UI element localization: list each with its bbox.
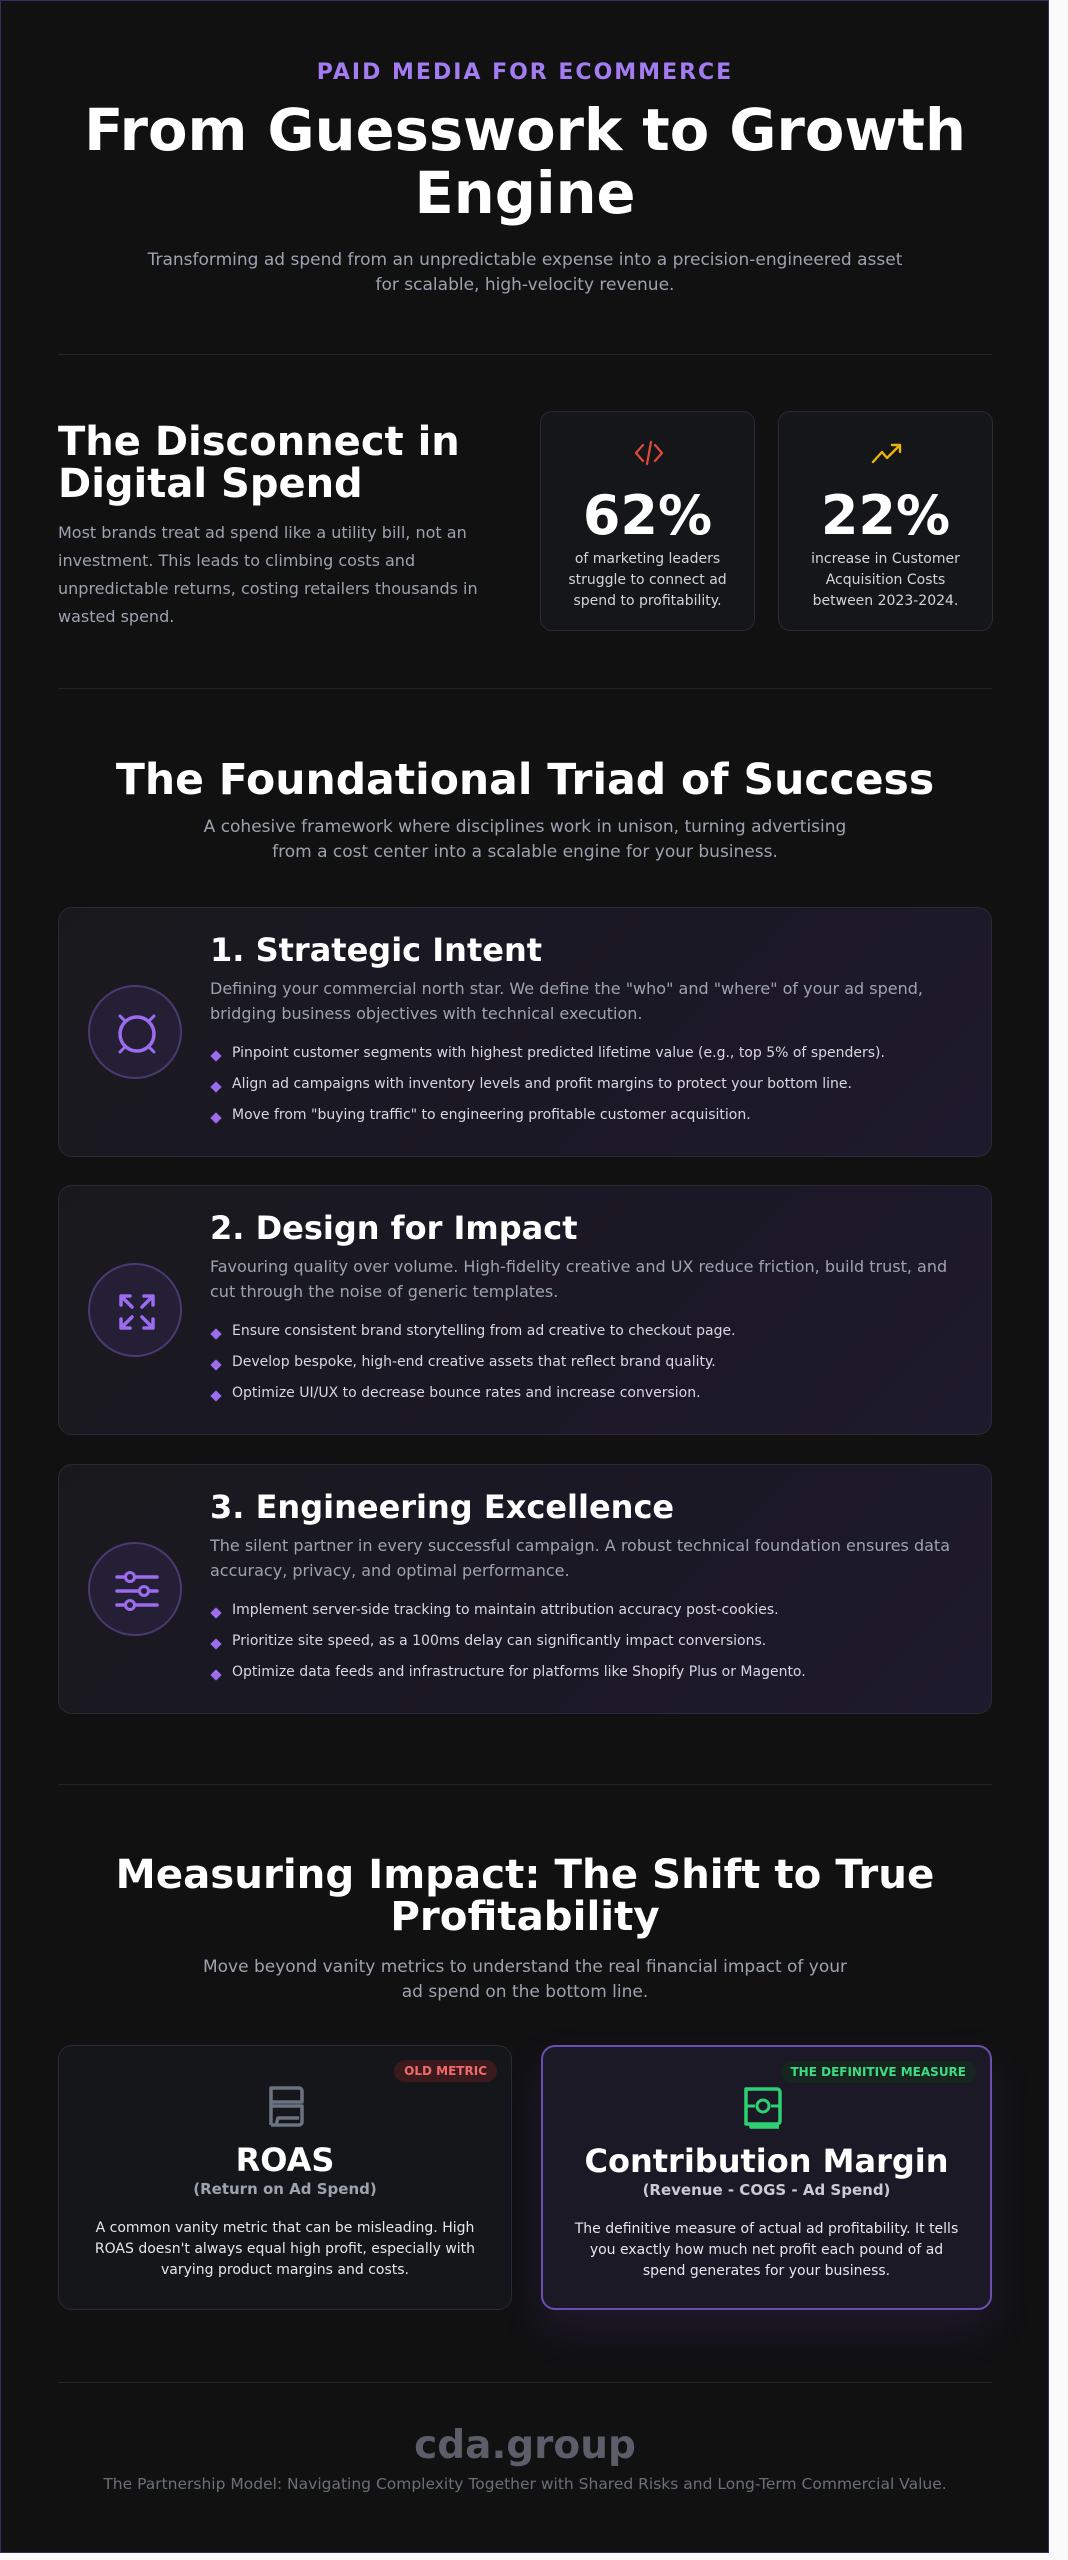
icon: wallet grey (269, 2086, 304, 2127)
panel: engineering excellence: The silent partner in every successful campaign. A robust technical foundation ensures data accuracy, privacy, and optimal performance. (210, 1536, 950, 1580)
stat card: 22% (778, 411, 993, 631)
panel: ROAS: A common vanity metric that can be misleading. High ROAS doesn't always equal high profit, especially with varying product margins and costs. (95, 2220, 475, 2278)
panel: design for impact: Develop bespoke, high-end creative assets that reflect brand quality. (232, 1354, 716, 1370)
panel: engineering excellence (58, 1464, 992, 1714)
triad subtitle: A cohesive framework where disciplines work in unison, turning advertising from a cost center into a scalable engine for your business. (204, 817, 846, 862)
panel: strategic intent: 1. Strategic Intent (210, 931, 542, 969)
panel: ROAS: ROAS (236, 2141, 334, 2179)
panel: design for impact: Ensure consistent brand storytelling from ad creative to checkout page. (232, 1323, 736, 1339)
stat card: 62%: of marketing leaders struggle to connect ad spend to profitability. (568, 551, 727, 609)
heading: triad: The Foundational Triad of Success (116, 756, 934, 805)
panel: engineering excellence: 3. Engineering Excellence (210, 1488, 674, 1526)
panel: contribution margin (541, 2045, 992, 2310)
panel: design for impact: 2. Design for Impact (210, 1209, 578, 1247)
panel: engineering excellence: Implement server-side tracking to maintain attribution accuracy post-cookies. (232, 1602, 779, 1618)
panel: contribution margin: (Revenue - COGS - Ad Spend) (643, 2181, 890, 2199)
panel: design for impact: Favouring quality over volume. High-fidelity creative and UX reduce friction, build trust, and cut through the noise of generic templates. (210, 1257, 947, 1301)
stat card: 62% (540, 411, 755, 631)
measuring subtitle: Move beyond vanity metrics to understand the real financial impact of your ad spend on the bottom line. (203, 1957, 847, 2002)
panel: ROAS: (Return on Ad Spend) (193, 2180, 377, 2198)
icon: money green (744, 2087, 782, 2129)
badge: definitive measure (780, 2061, 976, 2083)
icon: sliders (88, 1542, 182, 1636)
subtitle: Transforming ad spend from an unpredictable expense into a precision-engineered asset for scalable, high-velocity revenue. (148, 250, 902, 295)
panel: strategic intent: Pinpoint customer segments with highest predicted lifetime value (e.g., top 5% of spenders). (232, 1045, 885, 1061)
panel: engineering excellence: Optimize data feeds and infrastructure for platforms like Shopify Plus or Magento. (232, 1664, 806, 1680)
panel: strategic intent (58, 907, 992, 1157)
footer brand: cda.group (414, 2423, 636, 2468)
eyebrow label: PAID MEDIA FOR ECOMMERCE (317, 60, 733, 85)
badge: old metric (394, 2060, 497, 2082)
panel: strategic intent: Defining your commercial north star. We define the "who" and "where" of your ad spend, bridging business objectives with technical execution. (210, 979, 923, 1023)
panel: design for impact (58, 1185, 992, 1435)
icon: target (88, 985, 182, 1079)
panel: contribution margin: The definitive measure of actual ad profitability. It tells you exactly how much net profit each pound of ad spend generates for your business. (575, 2221, 958, 2279)
title: From Guesswork to Growth Engine (84, 97, 966, 227)
badge: old metric: OLD METRIC (404, 2064, 487, 2078)
section: disconnect (58, 419, 478, 626)
stat card: 62%: 62% (583, 484, 712, 547)
panel: engineering excellence: Prioritize site speed, as a 100ms delay can significantly impact conversions. (232, 1633, 766, 1649)
badge: definitive measure: THE DEFINITIVE MEASURE (790, 2065, 966, 2079)
heading: measuring impact: Measuring Impact: The Shift to True Profitability (116, 1851, 934, 1940)
panel: strategic intent: Move from "buying traffic" to engineering profitable customer acquisition. (232, 1107, 751, 1123)
icon: code (634, 440, 664, 466)
heading: disconnect: The Disconnect in Digital Spend (58, 419, 460, 507)
footer tagline: The Partnership Model: Navigating Complexity Together with Shared Risks and Long-Term Commercial Value. (103, 2475, 947, 2493)
panel: strategic intent: Align ad campaigns with inventory levels and profit margins to protect your bottom line. (232, 1076, 852, 1092)
panel: contribution margin: Contribution Margin (584, 2142, 949, 2180)
paragraph: Most brands treat ad spend like a utility bill, not an investment. This leads to climbing costs and unpredictable returns, costing retailers thousands in wasted spend. (58, 523, 478, 626)
panel: ROAS (58, 2045, 512, 2310)
stat card: 22%: increase in Customer Acquisition Costs between 2023-2024. (811, 551, 960, 609)
icon: trending up (872, 444, 902, 464)
stat card: 22%: 22% (821, 484, 950, 547)
icon: expand (88, 1263, 182, 1357)
panel: design for impact: Optimize UI/UX to decrease bounce rates and increase conversion. (232, 1385, 701, 1401)
